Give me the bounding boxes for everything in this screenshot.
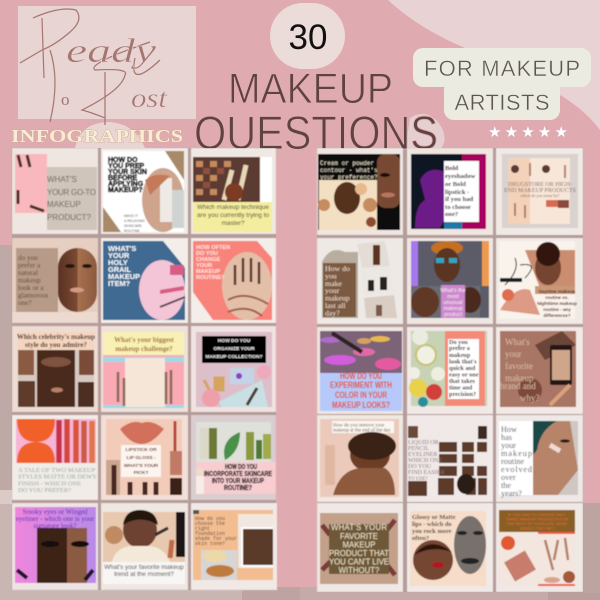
panel: tile 5 holy grail: MAKEUP <box>108 272 140 281</box>
panel: tile 21 daytime or nighttime: differences? <box>543 313 571 318</box>
panel: tile 23 quick or precise: quick and <box>449 365 476 372</box>
panel: tile 30 three products: IF YOU HAD TO CHOOSE ONLY <box>508 512 566 517</box>
panel: tile 11 lipstick or gloss: PICK? <box>134 470 148 476</box>
title: QUESTIONS <box>194 106 438 159</box>
panel: tile 12 skincare: HOW DO YOU <box>225 464 257 471</box>
panel: tile 28 can't live without: YOU CAN'T LIVE <box>329 558 389 566</box>
panel: tile 23 quick or precise <box>407 327 493 414</box>
panel: tile 13 smoky or winged: eyeliner - which one is your <box>16 515 95 523</box>
panel: tile 15 right foundation: right <box>195 526 210 532</box>
panel: tile 27 routine evolved: your <box>501 441 516 450</box>
panel: tile 5 holy grail: HOLY <box>108 258 128 267</box>
panel: tile 20 most unusual product <box>407 238 493 324</box>
panel: tile 15 right foundation: shade for your <box>195 536 237 542</box>
panel: tile 19 last all day: How do <box>325 264 350 273</box>
panel: tile 2 prep skin: APPLYING <box>108 181 144 188</box>
panel: tile 27 routine evolved: over <box>501 473 516 482</box>
panel: tile 22 experiment with color: HOW DO YOU <box>340 371 382 381</box>
panel: tile 27 routine evolved: makeup <box>501 449 532 458</box>
panel: tile 6 change routine: HOW OFTEN <box>196 245 230 251</box>
panel: tile 20 most unusual product: makeup <box>443 306 463 312</box>
heading: infographics: INFOGRAPHICS <box>11 126 183 146</box>
panel: tile 24 favorite brand: why? <box>520 393 540 403</box>
panel: tile 13 smoky or winged: signature look? <box>34 522 76 530</box>
panel: tile 13 smoky or winged <box>12 503 98 590</box>
panel: tile 29 glossy or matte: Glossy or Matte <box>412 514 456 521</box>
panel: tile 9 organize collection: HOW DO YOU <box>218 338 251 344</box>
panel: tile 28 can't live without: FAVORITE <box>340 532 378 541</box>
panel: tile 25 remove makeup: makeup at the end of the day <box>333 428 391 434</box>
panel: tile 16 powder contour <box>317 148 403 235</box>
panel: tile 18 drugstore or high-end <box>496 148 583 235</box>
panel: tile 27 routine evolved: routine <box>501 457 525 466</box>
tile grid <box>12 148 583 592</box>
panel: tile 10 matte or dewy: FINISH - WHICH ONE <box>18 480 81 488</box>
panel: tile 4 natural or glamorous: natural <box>18 269 38 277</box>
panel: tile 7 celebrity style <box>12 326 98 412</box>
panel: tile 10 matte or dewy: STYLES MATTE OR DEWY <box>18 474 97 480</box>
panel: tile 15 right foundation: choose the <box>195 521 225 527</box>
panel: tile 1 go-to product: WHAT'S <box>47 175 77 184</box>
panel: tile 2 prep skin: YOU PREP <box>108 163 145 170</box>
panel: tile 9 organize collection: ORGANIZE YOUR <box>213 346 255 352</box>
panel: tile 17 bold eyeshadow: or Bold <box>445 181 466 188</box>
panel: tile 16 powder contour: your preference? <box>320 174 378 181</box>
callout: for makeup artists: ARTISTS <box>454 90 550 115</box>
panel: tile 17 bold eyeshadow: eyeshadow <box>445 173 476 180</box>
panel: tile 9 organize collection: MAKEUP COLLECTION? <box>205 354 263 360</box>
panel: tile 1 go-to product <box>12 148 98 234</box>
panel: tile 21 daytime or nighttime: routine vs. <box>545 295 569 300</box>
panel: tile 25 remove makeup <box>317 415 403 502</box>
panel: tile 10 matte or dewy <box>12 415 98 500</box>
panel: tile 2 prep skin: BEFORE <box>108 175 138 182</box>
panel: tile 26 liquid or pencil: FIND EASIER <box>408 470 445 476</box>
panel: tile 2 prep skin: MAKE IT <box>124 214 139 218</box>
panel: tile 12 skincare: INCORPORATE SKINCARE <box>204 471 272 478</box>
panel: tile 1 go-to product: MAKEUP <box>47 200 81 209</box>
panel: tile 3 makeup technique <box>191 148 276 234</box>
panel: tile 5 holy grail: GRAIL <box>108 265 131 274</box>
panel: tile 2 prep skin: HOW DO <box>108 157 138 164</box>
panel: tile 22 experiment with color: EXPERIMENT WITH <box>330 380 392 390</box>
panel: tile 26 liquid or pencil: PENCIL <box>408 446 429 452</box>
panel: tile 17 bold eyeshadow: lipstick - <box>445 189 469 196</box>
panel: tile 19 last all day: make <box>325 279 342 288</box>
panel: tile 8 biggest challenge: What's your biggest <box>114 336 175 344</box>
panel: tile 6 change routine <box>191 238 276 323</box>
panel: tile 30 three products: THREE MAKEUP PRODUCTS FOR <box>506 516 569 522</box>
panel: tile 5 holy grail: ITEM? <box>108 279 131 288</box>
panel: tile 7 celebrity style: Which celebrity's makeup <box>17 333 95 341</box>
panel: tile 28 can't live without: PRODUCT THAT <box>329 549 389 558</box>
panel: tile 4 natural or glamorous: one? <box>18 299 32 307</box>
panel: tile 27 routine evolved: the <box>501 481 511 490</box>
panel: tile 28 can't live without: MAKEUP <box>343 540 375 550</box>
panel: tile 27 routine evolved: years? <box>501 489 522 498</box>
rating stars: ★★★★★ <box>488 124 568 141</box>
panel: tile 17 bold eyeshadow: to choose <box>445 204 471 211</box>
panel: tile 4 natural or glamorous: makeup <box>18 276 41 284</box>
panel: tile 11 lipstick or gloss: WHAT'S YOUR <box>124 463 159 469</box>
panel: tile 21 daytime or nighttime: Daytime makeup <box>539 289 575 294</box>
panel: tile 26 liquid or pencil: EYELINER <box>408 452 437 458</box>
panel: tile 27 routine evolved <box>496 415 583 502</box>
panel: tile 11 lipstick or gloss: LIPSTICK OR <box>126 447 157 453</box>
panel: tile 15 right foundation <box>191 503 277 590</box>
panel: tile 17 bold eyeshadow: if you had <box>445 196 474 203</box>
panel: tile 6 change routine: MAKEUP <box>196 269 221 275</box>
panel: tile 28 can't live without <box>317 503 403 592</box>
panel: tile 21 daytime or nighttime: routine - any <box>543 307 571 312</box>
panel: tile 13 smoky or winged: Smoky eyes or Winged <box>22 508 88 516</box>
panel: ready to post logo: ost <box>131 83 169 113</box>
panel: tile 3 makeup technique: Which makeup technique <box>197 204 269 211</box>
panel: tile 4 natural or glamorous: glamorous <box>18 292 49 300</box>
panel: tile 8 biggest challenge: makeup challenge? <box>115 345 173 353</box>
panel: tile 9 organize collection <box>191 326 276 412</box>
panel: tile 23 quick or precise: easy or one <box>449 372 479 378</box>
panel: tile 20 most unusual product: What's the <box>440 288 466 294</box>
panel: ready to post logo: eady <box>66 33 157 70</box>
panel: tile 17 bold eyeshadow <box>407 148 493 235</box>
panel: tile 22 experiment with color <box>317 327 403 414</box>
panel: tile 18 drugstore or high-end: END MAKEUP PRODUCTS <box>504 188 576 194</box>
callout: for makeup artists <box>413 48 591 120</box>
panel: tile 29 glossy or matte: often? <box>412 535 429 542</box>
panel: tile 22 experiment with color: COLOR IN YOUR <box>335 390 387 400</box>
panel: tile 19 last all day: day? <box>325 308 340 318</box>
panel: tile 2 prep skin: ROUTINE <box>124 229 140 233</box>
panel: tile 19 last all day <box>317 238 403 324</box>
panel: tile 10 matte or dewy: A TALE OF TWO MAKEUP <box>18 467 96 474</box>
panel: tile 25 remove makeup: How do you remove your <box>333 424 385 428</box>
panel: tile 21 daytime or nighttime <box>496 238 583 324</box>
panel: tile 15 right foundation: foundation <box>195 531 225 537</box>
panel: tile 19 last all day: makeup <box>325 294 350 302</box>
panel: tile 16 powder contour: contour - what's <box>320 167 378 174</box>
panel: tile 4 natural or glamorous: do you <box>18 254 38 262</box>
panel: tile 19 last all day: last all <box>325 301 346 310</box>
panel: tile 10 matte or dewy: DO YOU PREFER? <box>18 487 71 494</box>
panel: tile 14 favorite trend <box>101 503 188 590</box>
badge: 30 <box>270 3 345 69</box>
panel: tile 29 glossy or matte: lips - which do <box>412 521 452 528</box>
panel: tile 19 last all day: you <box>325 272 337 280</box>
panel: tile 6 change routine: CHANGE <box>196 257 221 263</box>
panel: ready to post logo <box>18 6 196 125</box>
panel: tile 28 can't live without: WITHOUT? <box>339 566 380 575</box>
panel: tile 11 lipstick or gloss <box>101 415 188 500</box>
panel: tile 6 change routine: DO YOU <box>196 251 218 257</box>
panel: tile 5 holy grail: WHAT'S <box>108 244 136 253</box>
panel: tile 12 skincare: INTO YOUR MAKEUP <box>212 478 264 485</box>
panel: ready to post logo: o <box>61 90 70 109</box>
panel: tile 2 prep skin <box>101 148 188 234</box>
panel: tile 23 quick or precise: prefer a <box>449 345 470 352</box>
title <box>194 65 438 159</box>
panel: tile 8 biggest challenge <box>101 326 188 412</box>
panel: tile 15 right foundation: How do you <box>195 516 225 522</box>
panel: tile 23 quick or precise: Do you <box>449 339 468 346</box>
panel: tile 12 skincare: ROUTINE? <box>224 485 252 492</box>
panel: tile 29 glossy or matte: you rock more <box>412 528 452 535</box>
panel: tile 18 drugstore or high-end: DRUGSTORE OR HIGH- <box>508 182 572 188</box>
panel: tile 17 bold eyeshadow: one? <box>445 211 458 218</box>
panel: tile 26 liquid or pencil: LIQUID OR <box>408 440 438 446</box>
panel: tile 2 prep skin: MAKEUP? <box>108 187 143 194</box>
panel: tile 5 holy grail <box>101 238 188 323</box>
panel: tile 20 most unusual product: most <box>447 294 459 300</box>
panel: tile 26 liquid or pencil: TO USE? <box>408 477 428 482</box>
panel: tile 4 natural or glamorous <box>12 238 98 323</box>
panel: tile 16 powder contour: Cream or powder <box>320 160 374 167</box>
panel: tile 15 right foundation: skin tone? <box>195 541 225 547</box>
panel: tile 29 glossy or matte <box>407 503 493 592</box>
panel: tile 26 liquid or pencil: WHICH ONE <box>408 458 442 464</box>
panel: tile 20 most unusual product: unusual <box>444 300 462 306</box>
panel: tile 14 favorite trend: What's your favorite makeup <box>104 564 184 571</box>
panel: tile 24 favorite brand: What's <box>505 337 530 347</box>
panel: tile 30 three products: WOULD THEY BE? <box>520 526 555 530</box>
panel: tile 26 liquid or pencil: DO YOU <box>408 464 432 470</box>
panel: tile 23 quick or precise: time and <box>449 384 473 392</box>
panel: tile 19 last all day: your <box>325 286 340 295</box>
panel: tile 6 change routine: YOUR <box>196 263 212 269</box>
panel: tile 20 most unusual product: product <box>444 312 462 318</box>
panel: tile 27 routine evolved: evolved <box>501 465 532 474</box>
panel: tile 23 quick or precise: precision? <box>449 391 476 398</box>
panel: tile 2 prep skin: YOUR SKIN <box>108 169 147 176</box>
panel: tile 6 change routine: ROUTINE? <box>196 275 225 281</box>
panel: tile 18 drugstore or high-end: which do you swear by? <box>521 193 560 198</box>
panel: tile 24 favorite brand: makeup <box>505 373 534 383</box>
callout: for makeup artists: FOR MAKEUP <box>424 56 580 81</box>
panel: tile 1 go-to product: PRODUCT? <box>47 213 92 222</box>
panel: tile 30 three products: THE REST OF YOUR LIFE, WHAT <box>507 521 568 526</box>
panel: tile 24 favorite brand: favorite <box>505 361 533 371</box>
panel: tile 23 quick or precise: makeup <box>449 352 471 359</box>
title: MAKEUP <box>228 65 393 113</box>
panel: tile 11 lipstick or gloss: LIP GLOSS - <box>126 455 156 461</box>
panel: tile 7 celebrity style: style do you admire? <box>25 341 87 349</box>
panel: tile 23 quick or precise: that takes <box>449 378 476 385</box>
panel: tile 12 skincare <box>191 415 276 500</box>
panel: tile 24 favorite brand <box>496 327 583 414</box>
panel: tile 17 bold eyeshadow: Bold <box>445 165 459 172</box>
panel: tile 2 prep skin: A RELAXING <box>124 219 145 223</box>
panel: tile 4 natural or glamorous: prefer a <box>18 262 41 270</box>
panel: tile 4 natural or glamorous: look or a <box>18 284 44 292</box>
panel: tile 30 three products <box>496 503 583 592</box>
panel: tile 5 holy grail: YOUR <box>108 251 130 260</box>
panel: tile 26 liquid or pencil <box>407 415 493 502</box>
panel: tile 28 can't live without: WHAT'S YOUR <box>331 523 387 532</box>
panel: tile 3 makeup technique: master? <box>221 220 245 227</box>
panel: tile 23 quick or precise: look that's <box>449 358 477 366</box>
panel: tile 24 favorite brand: brand and <box>500 381 536 391</box>
panel: tile 27 routine evolved: How <box>501 425 517 434</box>
panel: tile 24 favorite brand: your <box>505 349 522 359</box>
panel: tile 3 makeup technique: are you currently trying to <box>197 212 269 219</box>
badge: 30: 30 <box>289 18 327 57</box>
panel: tile 1 go-to product: YOUR GO-TO <box>47 188 96 197</box>
panel: tile 27 routine evolved: has <box>501 433 512 442</box>
panel: tile 14 favorite trend: trend at the moment? <box>114 571 174 578</box>
panel: tile 2 prep skin: SKINCARE <box>124 224 143 228</box>
panel: tile 22 experiment with color: MAKEUP LOOKS? <box>332 400 390 410</box>
panel: tile 21 daytime or nighttime: Nighttime makeup <box>537 301 577 306</box>
